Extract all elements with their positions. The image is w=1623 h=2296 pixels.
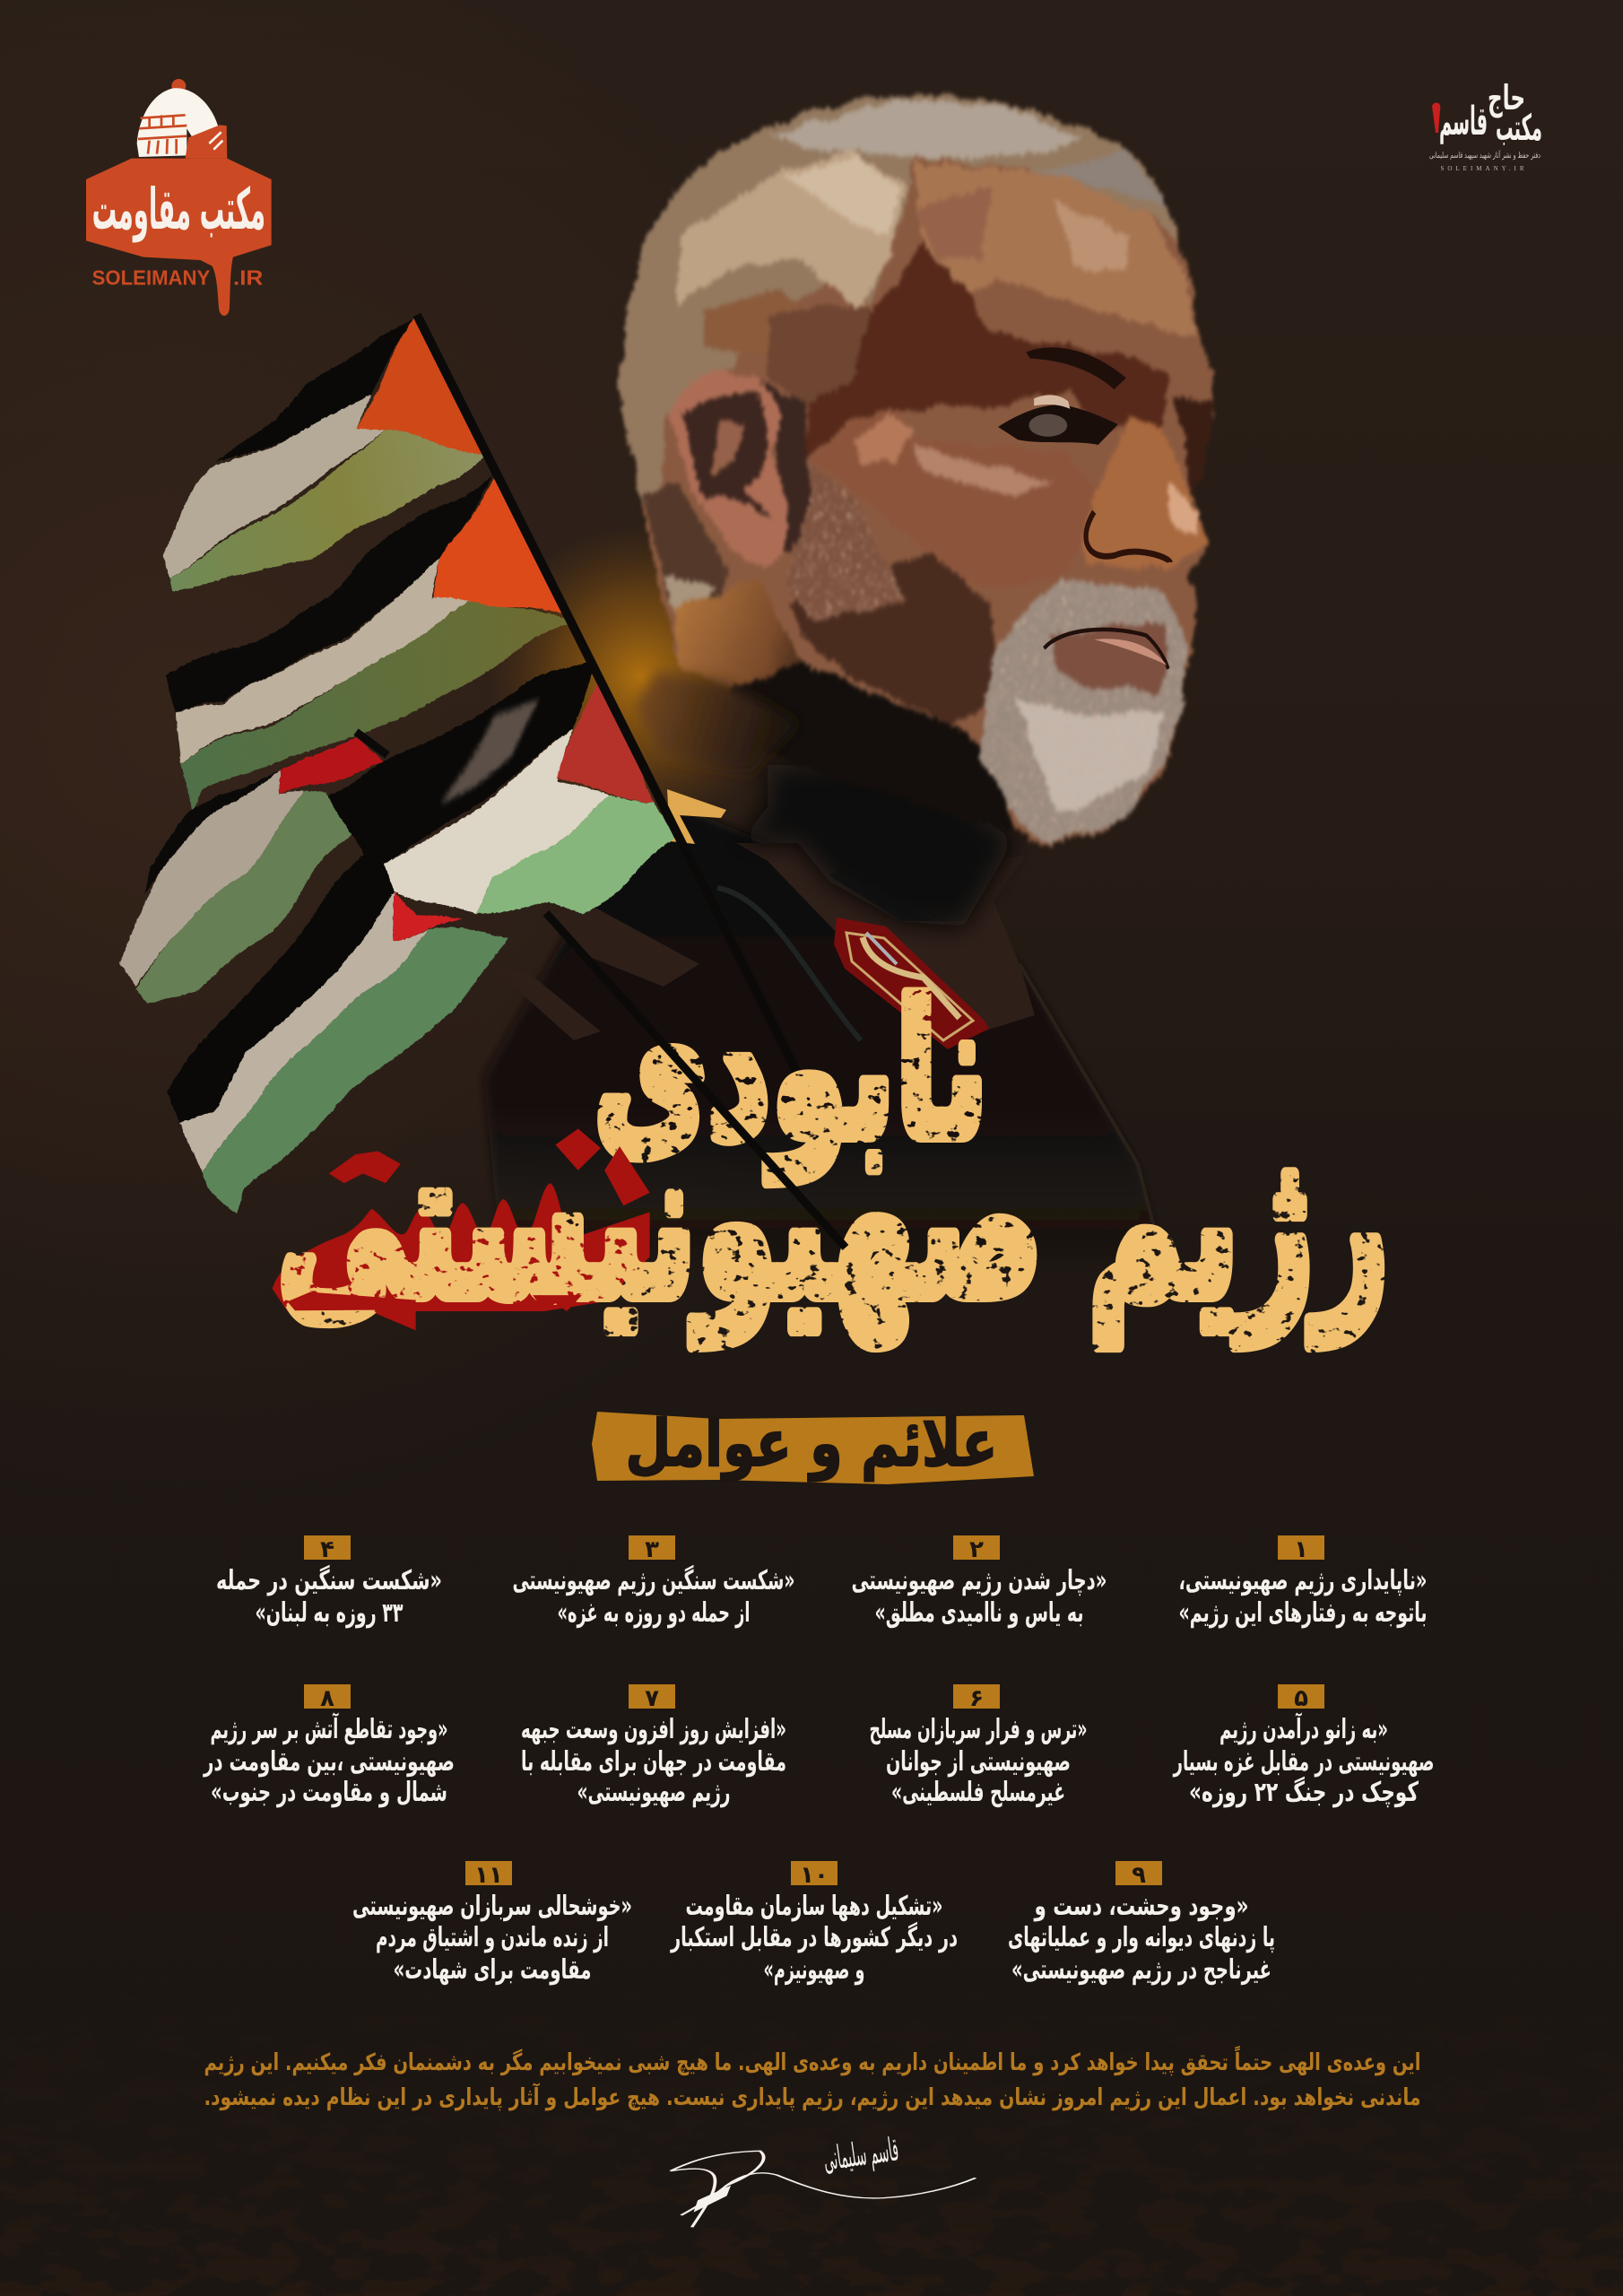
stubble (785, 460, 906, 620)
ear back (762, 383, 810, 553)
item 5: صهیونیستی در مقابل غزه بسیار (1172, 1746, 1435, 1778)
blood splash behind title (273, 1183, 650, 1330)
forehead (914, 161, 1198, 332)
logo url suffix: .IR (233, 265, 263, 289)
item 9: «وجود وحشت، دست و (1033, 1891, 1248, 1922)
item 11: از زنده ماندن و اشتیاق مردم (376, 1922, 609, 1953)
item 3: ۳ (645, 1536, 659, 1563)
item 6: «ترس و فرار سربازان مسلح (870, 1714, 1087, 1745)
item 10: ۱۰ (800, 1862, 829, 1889)
title line 1: نابودی (594, 961, 988, 1182)
temple shade (806, 244, 1170, 460)
shoulder strap gold (667, 789, 726, 844)
hair highlight (678, 152, 904, 311)
portrait (620, 95, 1214, 849)
item 5: «به زانو درآمدن رژیم (1219, 1712, 1388, 1745)
subtitle banner (592, 1405, 1034, 1484)
logo: right maktab (1429, 78, 1542, 172)
epaulette badge (834, 918, 989, 1049)
text: مکتب مقاومت (92, 176, 265, 243)
item 10 (670, 1861, 958, 1986)
jacket shadow folds (489, 906, 699, 1040)
flag: top (160, 317, 486, 591)
item 2: به یاس و ناامیدی مطلق» (875, 1597, 1083, 1629)
temple hair patch (770, 306, 870, 409)
item 4 (216, 1535, 442, 1629)
title overlay pole (546, 913, 846, 1248)
logo plate with drip (86, 159, 272, 316)
subtitle text: علائم و عوامل (626, 1405, 997, 1482)
title (273, 961, 1389, 1346)
item 3: از حمله دو روزه به غزه» (558, 1597, 750, 1629)
item 9 (1008, 1861, 1275, 1986)
item 7 (521, 1684, 786, 1808)
flag: front (166, 658, 676, 1215)
lower hair (644, 481, 730, 610)
flag: second (166, 473, 574, 818)
jacket brown lit area (736, 843, 1035, 1036)
jacket right edge (1020, 964, 1166, 1274)
item 2: «دچار شدن رژیم صهیونیستی (852, 1565, 1107, 1596)
jacket collar black (736, 765, 1014, 926)
item 4: ۴ (320, 1536, 334, 1563)
item 5: کوچک در جنگ ۲۲ روزه» (1189, 1776, 1419, 1808)
item 8 (203, 1684, 455, 1808)
item 6 (870, 1684, 1087, 1808)
item 10: «تشکیل دهها سازمان مقاومت (685, 1891, 943, 1922)
signature (671, 2131, 976, 2227)
red overlay on title (288, 1129, 650, 1311)
item 6: غیرمسلح فلسطینی» (891, 1777, 1065, 1808)
item 8: صهیونیستی ،بین مقاومت در (203, 1746, 455, 1778)
item 8: «وجود تقاطع آتش بر سر رژیم (210, 1712, 448, 1745)
hair bright (785, 157, 898, 234)
item 8: ۸ (320, 1685, 334, 1712)
item 1: ۱ (1294, 1536, 1308, 1563)
jacket seam (717, 888, 861, 1040)
item 7: رژیم صهیونیستی» (577, 1777, 730, 1808)
uniform jacket (484, 765, 1166, 1274)
item 7: «افزایش روز افزون وسعت جبهه (521, 1714, 786, 1745)
neck (673, 578, 810, 687)
item 5: ۵ (1294, 1685, 1308, 1712)
hair top grey (770, 98, 1082, 159)
item 9: پا زدنهای دیوانه وار و عملیاتهای (1008, 1922, 1275, 1953)
jaw shadow (730, 661, 1014, 831)
item 7: ۷ (645, 1685, 659, 1712)
signature: قاسم سلیمانی (821, 2131, 901, 2179)
red drop (1432, 103, 1440, 133)
collar (634, 672, 802, 774)
background (0, 0, 1623, 1261)
item 11: ۱۱ (474, 1862, 503, 1889)
item 3 (513, 1535, 794, 1629)
item 7: مقاومت در جهان برای مقابله با (521, 1746, 786, 1778)
item 1: باتوجه به رفتارهای این رژیم» (1178, 1597, 1428, 1629)
item 3: «شکست سنگین رژیم صهیونیستی (513, 1564, 794, 1596)
mouth area (1050, 625, 1170, 692)
item 11: مقاومت برای شهادت» (393, 1954, 592, 1986)
cheek (810, 409, 1098, 584)
palestinian flags (119, 317, 676, 1215)
item 2: ۲ (969, 1536, 984, 1563)
item 4: «شکست سنگین در حمله (216, 1564, 442, 1596)
item 6: صهیونیستی از جوانان (886, 1746, 1071, 1778)
item 6: ۶ (969, 1685, 984, 1712)
quote (204, 2045, 1420, 2111)
item 9: غیرناجح در رژیم صهیونیستی» (1011, 1954, 1271, 1986)
logo small text: دفتر حفظ و نشر آثار شهید سپهبد قاسم سلیمانی (1429, 150, 1541, 161)
flag poles (356, 315, 819, 1116)
item 10: و صهیونیزم» (764, 1954, 864, 1986)
head base (620, 95, 1214, 849)
item 11 (352, 1861, 632, 1986)
far eye socket (1170, 398, 1214, 491)
eye (998, 395, 1118, 445)
logo: right maktab: قاسم (1439, 99, 1488, 144)
ear (670, 372, 785, 565)
logo: left soleimany (86, 79, 272, 316)
hair rust (702, 291, 810, 357)
item 4: ۳۳ روزه به لبنان» (255, 1597, 404, 1629)
flag: third behind (119, 735, 384, 1006)
hair right grey (1030, 152, 1170, 208)
side beard dark (790, 553, 1002, 723)
eyebrow (1026, 347, 1126, 389)
logo url: SOLEIMANY (92, 265, 210, 289)
item 8: شمال و مقاومت در جنوب» (211, 1777, 447, 1808)
item 9: ۹ (1132, 1862, 1146, 1889)
lips (1044, 630, 1168, 669)
nose (1082, 419, 1206, 569)
logo word haj: حاج (1488, 78, 1525, 117)
logo url: SOLEIMANY.IR (1440, 165, 1528, 172)
item 5 (1172, 1684, 1435, 1808)
hair (620, 95, 1178, 501)
text: مکتب (1496, 108, 1542, 149)
beard (982, 584, 1190, 847)
dome (137, 79, 227, 159)
item 11: «خوشحالی سربازان صهیونیستی (352, 1891, 632, 1922)
item 1: «ناپایداری رژیم صهیونیستی، (1178, 1565, 1428, 1596)
item 10: در دیگر کشورها در مقابل استکبار (670, 1921, 958, 1953)
nostril line (1086, 512, 1170, 562)
item 1 (1178, 1535, 1428, 1629)
item 2 (852, 1535, 1107, 1629)
